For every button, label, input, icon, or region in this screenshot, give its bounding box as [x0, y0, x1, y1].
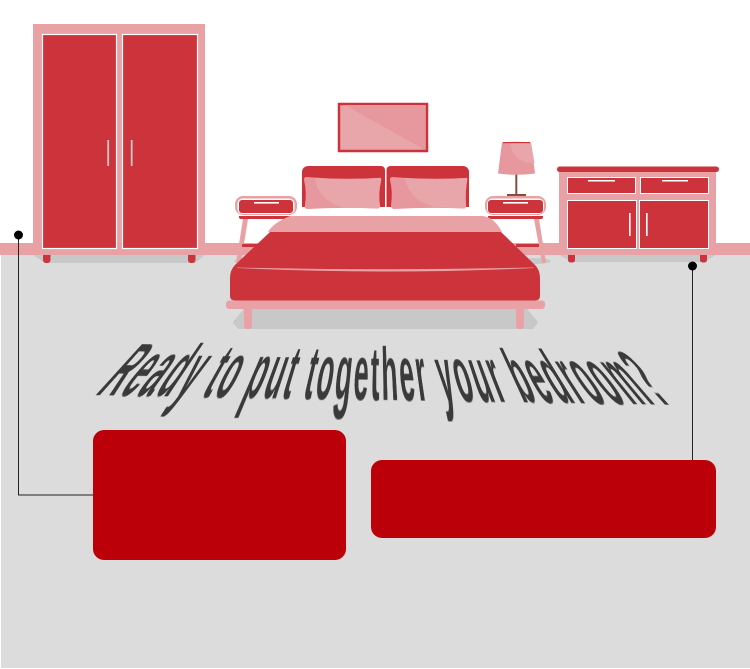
pillows [304, 177, 467, 209]
table lamp [498, 142, 535, 196]
left nightstand [234, 196, 297, 264]
right callout box [371, 460, 716, 538]
floor [1, 255, 750, 668]
connector: dresser to right box [688, 262, 697, 460]
bed [226, 166, 545, 329]
wall skirting band [0, 243, 750, 255]
duvet highlight [237, 268, 534, 272]
bed legs [244, 305, 524, 329]
headboard [302, 166, 469, 207]
blanket fold [268, 216, 502, 232]
title: Ready to put together your bedroom? [74, 333, 699, 427]
wardrobe [33, 24, 205, 263]
connector: wardrobe to left box [14, 230, 93, 495]
left callout box [93, 430, 346, 560]
bed shadow [234, 310, 536, 328]
wall picture [339, 104, 427, 151]
duvet [230, 232, 540, 300]
dresser [557, 166, 719, 262]
bed frame [226, 300, 545, 309]
right nightstand with lamp [485, 142, 551, 264]
